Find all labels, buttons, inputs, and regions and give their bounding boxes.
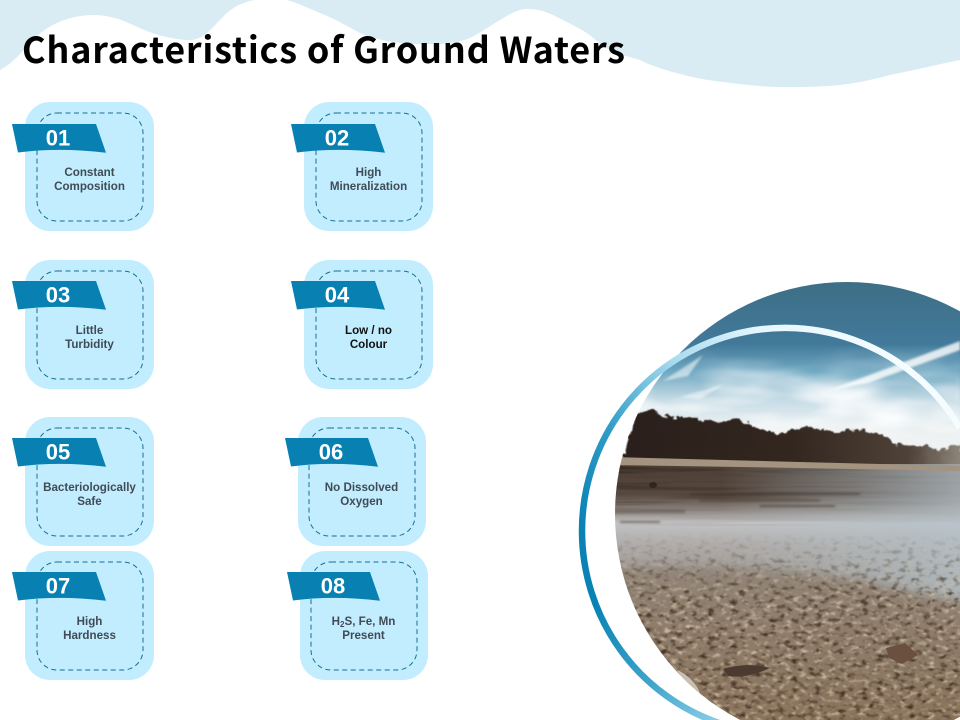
ribbon 08 xyxy=(287,572,380,601)
ribbon 06: 06 xyxy=(319,440,343,464)
gravel shore xyxy=(580,565,960,720)
card 04 xyxy=(291,260,433,389)
tree line xyxy=(622,408,960,464)
ribbon 04: 04 xyxy=(325,282,350,308)
card 03 xyxy=(12,260,154,389)
card 06 xyxy=(285,417,426,546)
label 08: Present xyxy=(342,629,385,642)
ribbon 02: 02 xyxy=(325,126,349,150)
label 01: Composition xyxy=(54,180,125,193)
card 08 xyxy=(287,551,428,680)
title: Characteristics of Ground Waters xyxy=(22,22,625,74)
label 01: Constant xyxy=(64,166,115,179)
label 03: Turbidity xyxy=(65,338,114,351)
ring arc upper xyxy=(582,328,960,531)
label 04: Low / no xyxy=(345,324,392,337)
water xyxy=(600,464,960,610)
ribbon 04 xyxy=(291,281,385,310)
ribbon 01: 01 xyxy=(46,126,70,150)
header wave background xyxy=(0,0,960,87)
label 08: S, Fe, Mn xyxy=(344,615,395,628)
ribbon 03 xyxy=(12,281,106,310)
ring arc lower xyxy=(582,531,722,720)
ribbon 08: 08 xyxy=(321,574,345,598)
label 06: No Dissolved xyxy=(325,481,398,494)
card 01 xyxy=(12,102,154,231)
label 02: Mineralization xyxy=(330,180,407,193)
rocks xyxy=(886,643,918,664)
ribbon 07: 07 xyxy=(46,574,70,598)
ribbon 05: 05 xyxy=(46,440,70,464)
label 07: Hardness xyxy=(63,629,116,642)
label 05: Bacteriologically xyxy=(43,481,136,494)
label 08: H xyxy=(332,615,340,628)
ribbon 02 xyxy=(291,124,385,153)
ribbon 03: 03 xyxy=(46,282,70,308)
label 03: Little xyxy=(76,324,103,337)
label 08: 2 xyxy=(340,620,345,629)
card 07 xyxy=(12,551,154,680)
label 07: High xyxy=(77,615,102,628)
label 06: Oxygen xyxy=(340,495,383,508)
label 02: High xyxy=(356,166,381,179)
ribbon 01 xyxy=(12,124,106,153)
card 05 xyxy=(12,417,154,546)
ribbon 05 xyxy=(12,438,106,467)
card 02 xyxy=(291,102,433,231)
ribbon 07 xyxy=(12,572,106,601)
ribbon 06 xyxy=(285,438,378,467)
label 04: Colour xyxy=(350,338,388,351)
label 05: Safe xyxy=(77,495,102,508)
far shore xyxy=(610,457,960,471)
photo: lake shore in circle xyxy=(580,282,960,720)
